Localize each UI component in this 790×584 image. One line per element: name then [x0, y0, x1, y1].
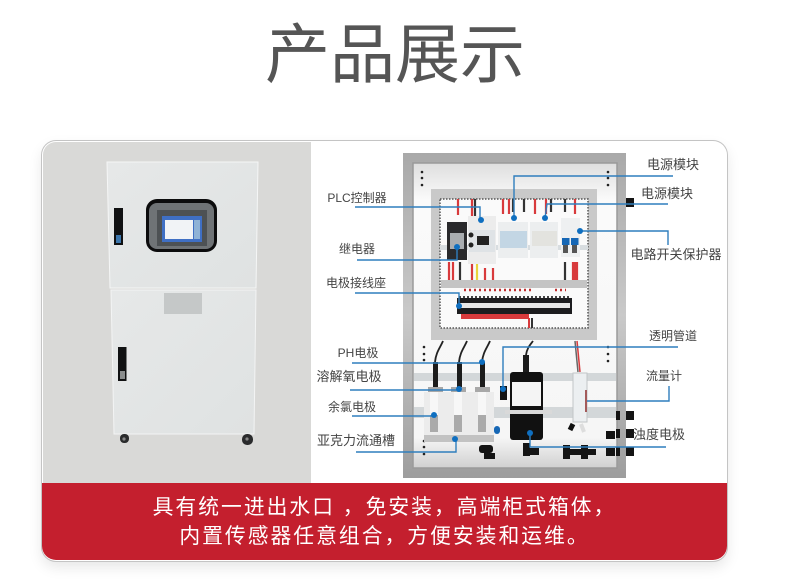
callout: 浊度电极	[527, 427, 685, 447]
callout: 电极接线座	[326, 275, 462, 309]
callout: 继电器: 继电器	[339, 242, 375, 256]
callout: 透明管道: 透明管道	[649, 328, 697, 343]
title: 产品展示	[265, 18, 525, 91]
panel: product card background	[42, 141, 727, 561]
caption banner: 内置传感器任意组合，方便安装和运维。	[179, 525, 590, 548]
callout: 透明管道	[500, 328, 697, 392]
callout: PH电极	[338, 346, 485, 365]
power module 1	[498, 222, 528, 258]
callout: 继电器	[339, 242, 460, 260]
icon: upper door handle	[114, 208, 123, 245]
callout: 电路开关保护器: 电路开关保护器	[630, 247, 722, 262]
callout: 溶解氧电极: 溶解氧电极	[316, 369, 382, 384]
callout: 溶解氧电极	[316, 369, 462, 392]
callout: PH电极: PH电极	[338, 346, 378, 360]
callout: PLC控制器: PLC控制器	[327, 191, 387, 205]
panel frame	[403, 153, 626, 478]
callout: 电源模块 top	[511, 157, 699, 221]
electrode group	[424, 341, 494, 435]
relay	[447, 222, 467, 260]
cabinet lower door	[111, 290, 256, 434]
callout: PLC控制器	[327, 191, 484, 223]
icon: vent plate	[164, 293, 202, 314]
callout: 余氯电极	[328, 399, 437, 418]
callout: 亚克力流通槽	[317, 433, 458, 452]
circuit breaker	[561, 218, 580, 257]
callout: 电极接线座: 电极接线座	[326, 275, 386, 290]
callout: 电源模块 second: 电源模块	[641, 186, 693, 201]
callout: 余氯电极: 余氯电极	[328, 399, 376, 414]
panel: cabinet photo	[107, 162, 258, 445]
callout: 浊度电极: 浊度电极	[633, 427, 685, 442]
flow meter	[570, 341, 587, 432]
terminal block	[457, 290, 572, 328]
turbidity electrode tank	[505, 341, 552, 440]
mounting holes	[421, 171, 609, 455]
callout: 电路开关保护器	[577, 228, 722, 262]
caption banner: 具有统一进出水口 ，免安装，高端柜式箱体，	[153, 496, 616, 519]
PLC controller module	[468, 216, 496, 264]
icon: lower door handle	[118, 347, 126, 381]
wires upper	[449, 199, 577, 280]
callout: 亚克力流通槽: 亚克力流通槽	[317, 433, 395, 448]
icon: blue elbow fitting	[494, 426, 500, 434]
callout: 电源模块 top: 电源模块	[647, 157, 699, 172]
icon: wheels	[120, 434, 253, 445]
callout: 流量计: 流量计	[646, 369, 682, 383]
DIN rails lower	[414, 373, 616, 418]
acrylic flow cell base	[424, 435, 494, 442]
power module 2	[530, 222, 558, 258]
callout: 流量计	[587, 369, 682, 401]
panel: left cabinet photo area	[43, 142, 311, 483]
panel: control panel diagram	[403, 153, 634, 478]
pipe fittings	[479, 198, 634, 459]
icon: display window	[146, 199, 217, 252]
caption banner	[42, 483, 727, 560]
cabinet upper door	[107, 162, 258, 288]
callout: 电源模块 second	[542, 186, 693, 221]
electrical enclosure	[431, 189, 597, 340]
